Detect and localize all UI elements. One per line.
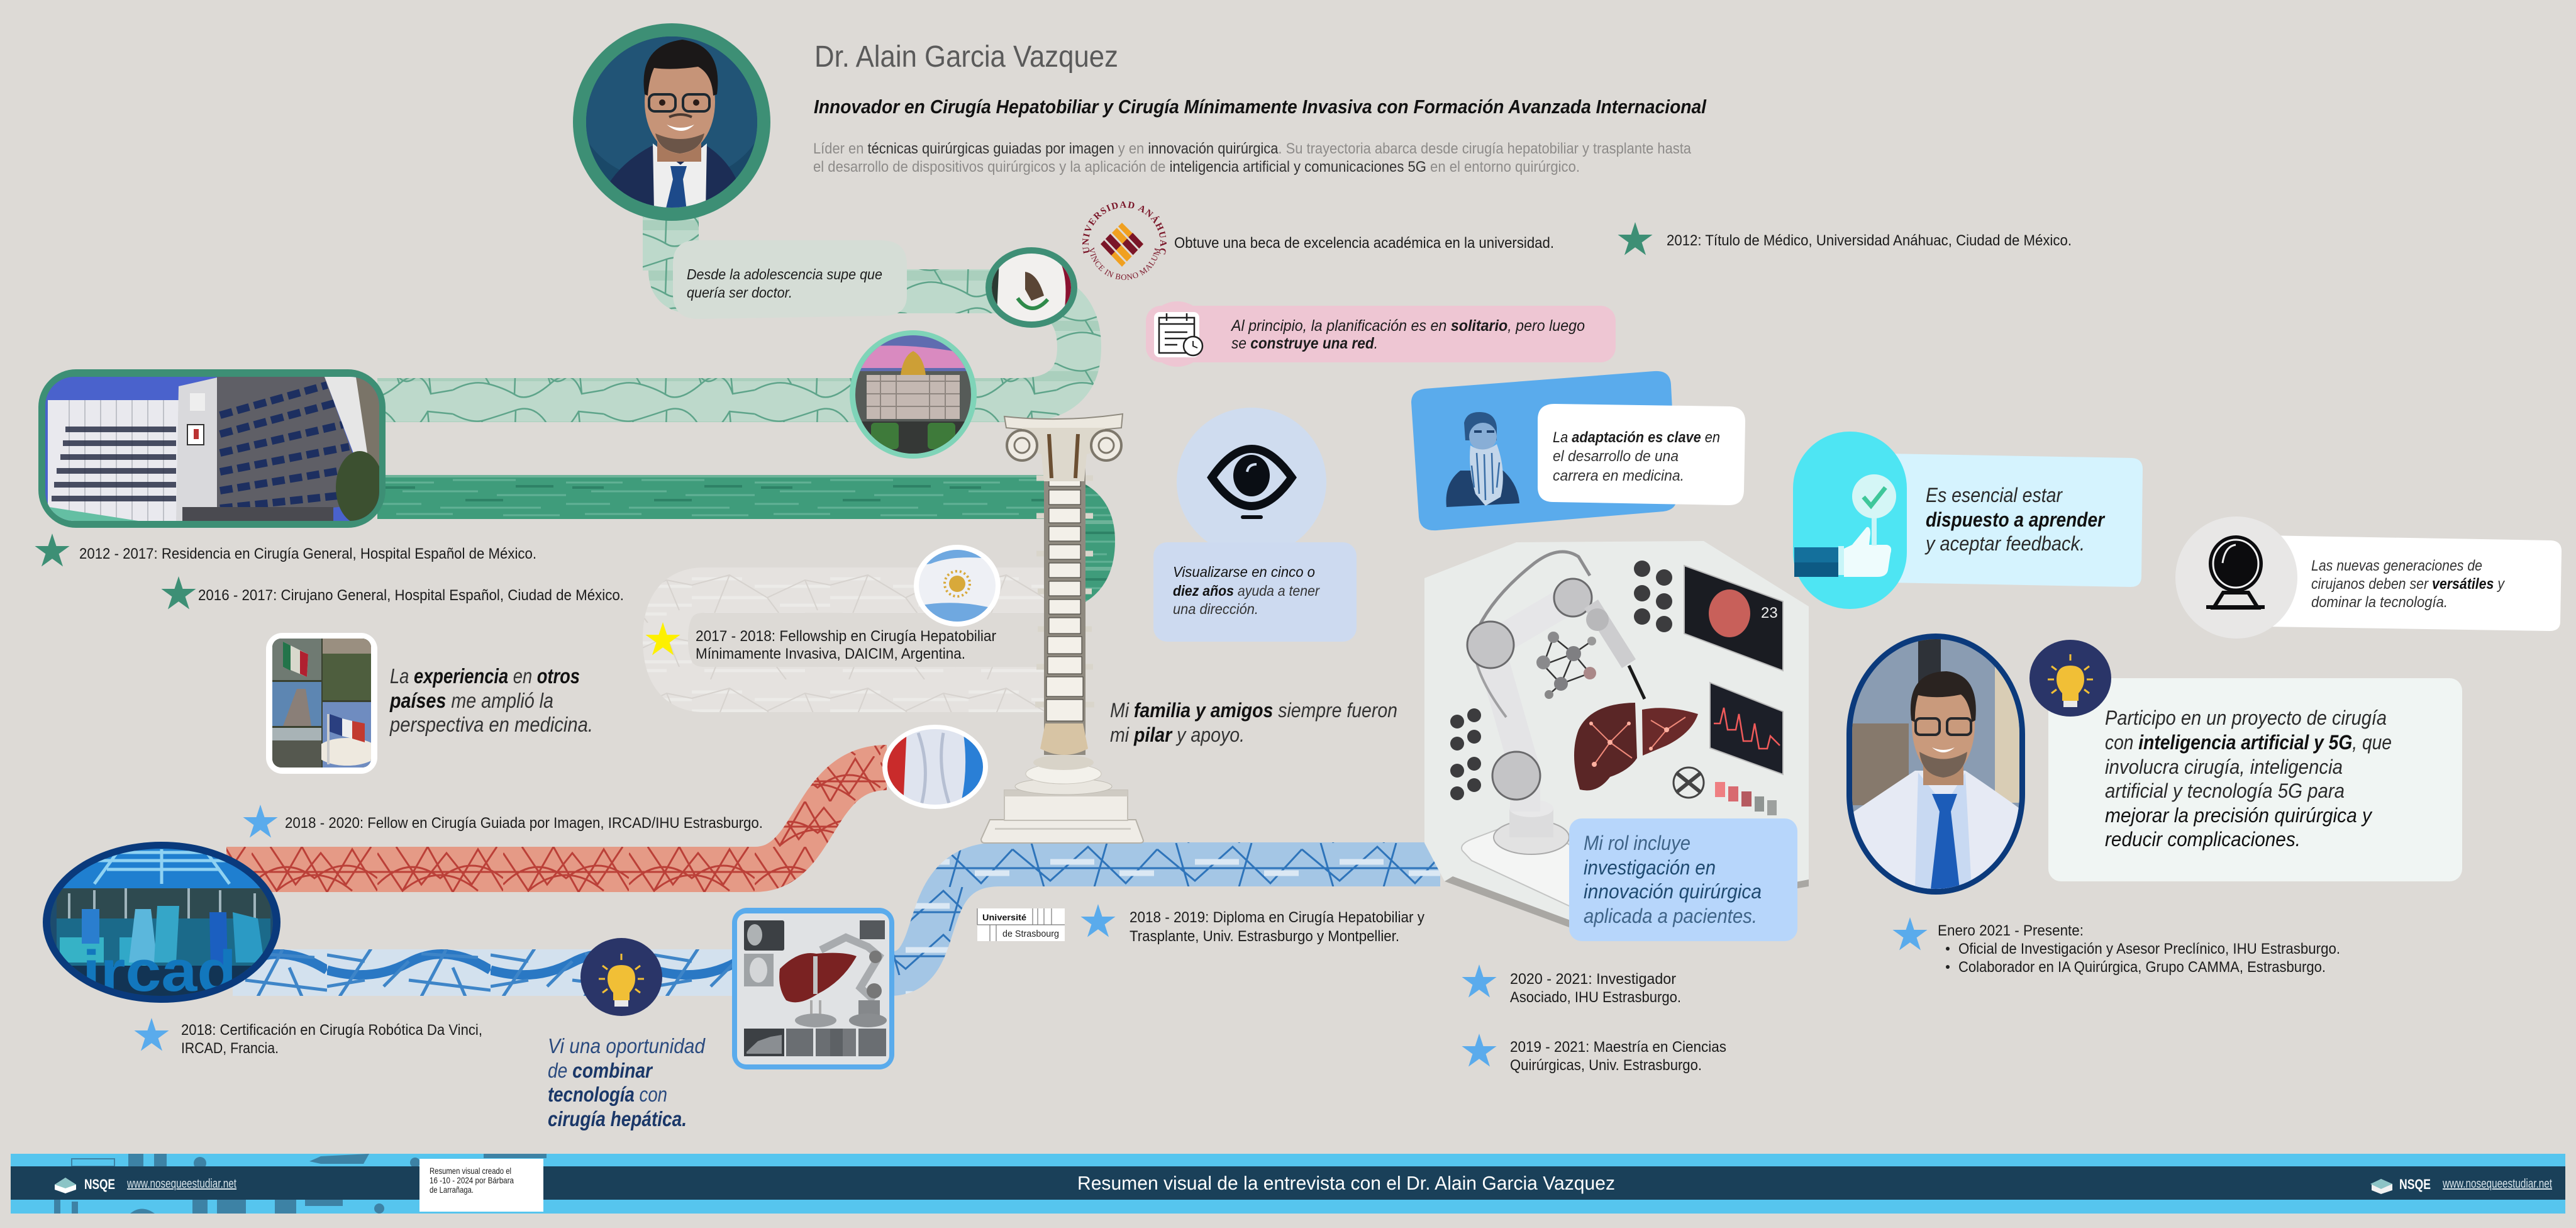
image: bandera de México [985,245,1077,328]
subtitle: Innovador en Cirugía Hepatobiliar y Cirugía Mínimamente Invasiva con Formación Avanzada Internacional [814,96,1707,118]
callout: planificación: Al principio, la planificación es en solitario, pero luego [1230,317,1585,335]
image: bandera de Argentina [914,545,1001,627]
milestone: fellowship Argentina [645,622,996,662]
molecule [1536,632,1596,699]
milestone: 2012 título: 2012: Título de Médico, Universidad Anáhuac, Ciudad de México. [1667,232,2072,249]
icon: thumb with check [1794,474,1896,577]
logo: NSQE left: www.nosequeestudiar.net [126,1177,236,1191]
title: Dr. Alain Garcia Vazquez [814,40,1118,74]
milestone: enero 2021 presente: Oficial de Investigación y Asesor Preclínico, IHU Estrasburgo. [1958,941,2340,957]
card: nuevas generaciones: dominar la tecnología. [2311,594,2448,611]
quote: familia y amigos: Mi familia y amigos siempre fueron [1110,699,1397,722]
milestone: enero 2021 presente: Colaborador en IA Quirúrgica, Grupo CAMMA, Estrasburgo. [1958,959,2326,976]
card: adaptación Darwin: carrera en medicina. [1553,467,1684,484]
quote: experiencia en otros países: La experiencia en otros [390,664,580,688]
card: visualizarse [1153,542,1357,642]
timeline pipe: green lower [377,497,1093,590]
illustration: robot quirúrgico [1424,541,1809,927]
quote: oportunidad: tecnología con [548,1083,667,1106]
card: nuevas generaciones: cirujanos deben ser versátiles y [2311,576,2506,593]
ircad wordmark: ircad [82,939,236,1003]
icon: calendar [1156,313,1202,355]
icon: Darwin portrait [1446,412,1519,507]
card: proyecto inteligencia artificial: mejorar la precisión quirúrgica y [2105,804,2373,827]
monitor: brain scan [1684,566,1783,671]
footer sketches [54,1154,547,1214]
card: mi rol: aplicada a pacientes. [1584,905,1757,927]
card: dispuesto a aprender: Es esencial estar [1926,484,2063,506]
milestone: maestría: 2019 - 2021: Maestría en Ciencias [1510,1039,1726,1056]
milestone: enero 2021 presente: Enero 2021 - Presente: [1938,922,2084,939]
image: quirófano IRCAD [43,842,280,1003]
milestone: residencia: 2012 - 2017: Residencia en Cirugía General, Hospital Español de México. [79,545,536,562]
card: adaptación Darwin: La adaptación es clave en [1553,429,1720,446]
milestone: certificación da Vinci: IRCAD, Francia. [181,1040,279,1057]
credit box [419,1159,543,1212]
image: Palacio de Bellas Artes [849,330,977,459]
milestone: diploma [1080,904,1424,945]
quote: experiencia en otros países: países me amplió la [389,689,553,712]
portrait: Dr. Alain bata blanca [1846,634,2025,895]
milestone: fellow guiada por imagen [243,805,763,837]
credit box: Resumen visual creado el [430,1166,511,1176]
timeline pipe: red [226,767,887,869]
icon: eye [1177,408,1326,556]
logo: NSQE left [55,1176,236,1193]
callout: planificación [1146,301,1616,367]
card: visualizarse: una dirección. [1173,601,1258,617]
milestone: maestría: Quirúrgicas, Univ. Estrasburgo. [1510,1057,1702,1074]
card: proyecto inteligencia artificial [2048,678,2462,881]
credit box: 16 -10 - 2024 por Bárbara [430,1175,514,1185]
logo: NSQE right: NSQE [2399,1176,2431,1192]
milestone: investigador asociado [1462,964,1681,1006]
timeline pipe: green upper [377,217,1079,400]
color swatches [1715,782,1777,815]
image: hígado y robot [732,908,894,1069]
card: mi rol: innovación quirúrgica [1584,880,1762,903]
milestone: certificación da Vinci [134,1018,482,1057]
card: proyecto inteligencia artificial: reducir complicaciones. [2105,828,2301,851]
card: dispuesto a aprender: dispuesto a aprender [1926,508,2105,531]
milestone: certificación da Vinci: 2018: Certificación en Cirugía Robótica Da Vinci, [181,1022,482,1039]
card: visualizarse: diez años ayuda a tener [1173,583,1320,599]
logo: Université de Strasbourg [977,908,1065,941]
monitor: ECG [1710,683,1783,774]
card: proyecto inteligencia artificial: involucra cirugía, inteligencia [2105,756,2343,778]
milestone: fellow guiada por imagen: 2018 - 2020: Fellow en Cirugía Guiada por Imagen, IRCAD/IHU Estrasburgo. [285,815,763,832]
milestone: cirujano general: 2016 - 2017: Cirujano General, Hospital Español, Ciudad de México. [198,587,624,604]
robot arm [1467,552,1645,812]
card: dispuesto a aprender [1793,432,2143,609]
card: proyecto inteligencia artificial: con inteligencia artificial y 5G, que [2105,731,2392,754]
quote: oportunidad: de combinar [548,1059,653,1082]
spine [1035,466,1094,755]
credit box: de Larrañaga. [430,1185,474,1195]
quote: familia y amigos [1110,699,1397,746]
quote: oportunidad: Vi una oportunidad [548,1034,706,1058]
image: collage de países [266,633,379,774]
quote: familia y amigos: mi pilar y apoyo. [1110,723,1245,746]
milestone: fellowship Argentina: 2017 - 2018: Fellowship en Cirugía Hepatobiliar [696,628,996,645]
monitor: brain scan: 23 [1761,605,1778,622]
quote: experiencia en otros países [389,664,593,736]
callout: planificación: se construye una red. [1231,335,1378,352]
intro paragraph: el desarrollo de dispositivos quirúrgicos y la aplicación de inteligencia artificial y comunicaciones 5G en el entorno quirúrgico. [813,159,1580,176]
card: dispuesto a aprender: y aceptar feedback. [1924,532,2085,555]
card: mi rol: Mi rol incluye [1584,832,1690,854]
logo: Universidad Anáhuac: UNIVERSIDAD ANÁHUAC [1082,201,1167,254]
card: visualizarse: Visualizarse en cinco o [1173,564,1315,580]
icon: fan [1674,767,1704,798]
text: beca de excelencia: Obtuve una beca de excelencia académica en la universidad. [1174,235,1554,252]
liver [1574,703,1698,790]
column base steps [981,755,1143,843]
milestone: diploma: 2018 - 2019: Diploma en Cirugía Hepatobiliar y [1130,909,1424,926]
image: bandera de Francia [882,725,988,809]
portrait: Dr. Alain [573,23,770,221]
milestone: residencia [35,533,536,566]
logo: NSQE right [2370,1176,2552,1194]
milestone: cirujano general [161,576,624,609]
logo: Université de Strasbourg: Université [982,912,1026,922]
logo: Universidad Anáhuac: VINCE IN BONO MALUM [1089,247,1160,281]
panel background [1424,541,1809,927]
quote: oportunidad: cirugía hepática. [548,1107,687,1130]
timeline pipe: blue lower [233,949,736,996]
milestone: 2012 título [1618,222,2072,255]
quote: experiencia en otros países: perspectiva en medicina. [389,713,593,736]
logo: NSQE left: NSQE [84,1176,115,1192]
card: nuevas generaciones: Las nuevas generaciones de [2311,557,2482,574]
milestone: investigador asociado: 2020 - 2021: Investigador [1510,971,1676,988]
milestone: diploma: Trasplante, Univ. Estrasburgo y Montpellier. [1130,928,1399,945]
intro paragraph: Líder en técnicas quirúrgicas guiadas por imagen y en innovación quirúrgica. Su trayectoria abarca desde cirugía hepatobiliar y trasplante hasta [813,140,1692,157]
milestone: maestría [1462,1034,1726,1074]
quote bubble: adolescencia: quería ser doctor. [687,284,792,301]
quote: oportunidad [548,1034,706,1130]
card: mi rol: investigación en [1584,856,1716,879]
base plate [1462,800,1610,906]
icon: crystal ball [2206,535,2265,609]
image: hospital español [38,369,386,528]
card: nuevas generaciones [2175,516,2562,639]
icon: lightbulb 2 [2029,640,2111,717]
milestone: fellowship Argentina: Mínimamente Invasiva, DAICIM, Argentina. [696,645,965,662]
card: adaptación Darwin [1411,371,1745,530]
footer banner [11,1154,2565,1214]
quote bubble: adolescencia: Desde la adolescencia supe que [687,266,882,282]
card: proyecto inteligencia artificial: Participo en un proyecto de cirugía [2105,706,2387,729]
milestone: investigador asociado: Asociado, IHU Estrasburgo. [1510,989,1681,1006]
card: proyecto inteligencia artificial: artificial y tecnología 5G para [2105,779,2345,802]
icon: lightbulb [580,938,662,1016]
card: adaptación Darwin: el desarrollo de una [1553,448,1679,465]
column capital [1004,414,1123,481]
timeline pipe: blue upper [890,864,1440,974]
icon buttons [1450,561,1672,800]
logo: Universidad Anáhuac [1082,201,1167,281]
logo: Université de Strasbourg: de Strasbourg [1002,929,1059,939]
card: mi rol [1569,818,1797,941]
milestone: enero 2021 presente [1892,917,2340,976]
timeline pipe: white [665,590,1057,689]
column with spine [981,414,1143,843]
quote bubble: adolescencia [673,240,907,319]
footer title: Resumen visual de la entrevista con el Dr. Alain Garcia Vazquez [1077,1172,1615,1194]
intro paragraph [813,140,1692,176]
